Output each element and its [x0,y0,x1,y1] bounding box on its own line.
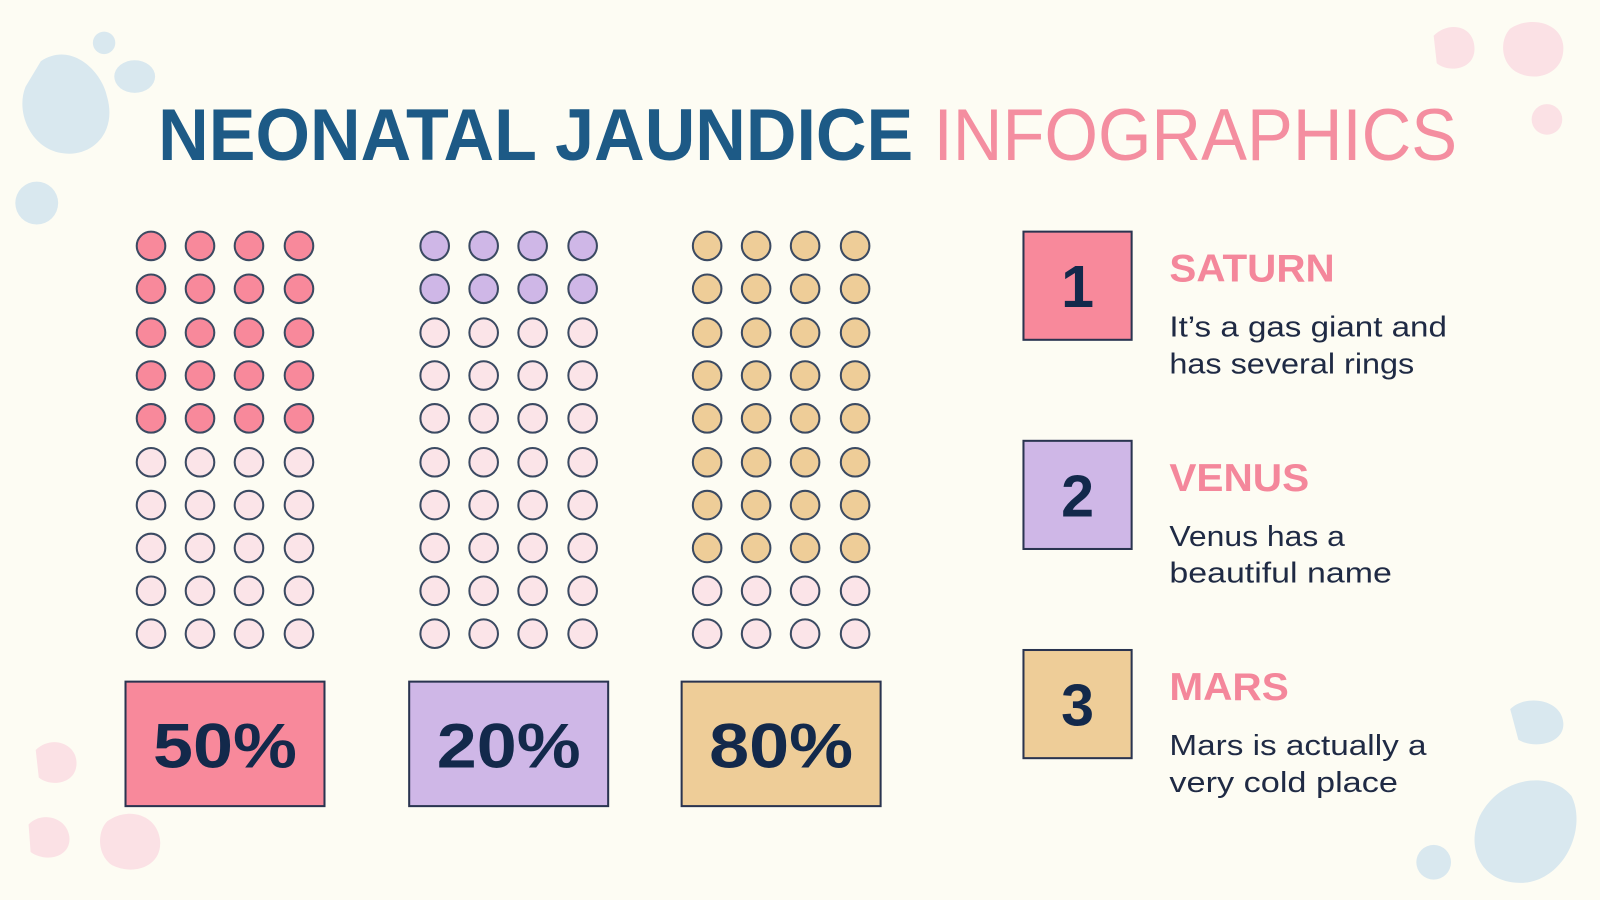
item 1: Saturn: has several rings [1169,348,1414,380]
item 2: Venus: 2 [1061,462,1094,529]
item 2: Venus: Venus has a [1169,521,1345,553]
item 3: Mars: Mars is actually a [1169,730,1427,762]
item 1: Saturn: SATURN [1169,248,1335,291]
percentage label: 20% [409,682,608,806]
item 2: Venus [1023,441,1392,590]
item 1: Saturn: 1 [1061,253,1094,320]
percentage label: 80% [682,682,881,806]
item 3: Mars: 3 [1061,672,1094,739]
percentage label: 50% [126,682,324,806]
item 2: Venus: VENUS [1169,457,1309,500]
item 3: Mars: very cold place [1169,767,1398,799]
percentage label: 50%: 50% [153,711,297,781]
item 3: Mars [1023,650,1427,799]
title: INFOGRAPHICS [934,93,1457,176]
dot chart: 80% [693,232,869,648]
percentage label: 80%: 80% [709,711,853,781]
percentage label: 20%: 20% [437,711,581,781]
dot chart: 20% [420,232,597,648]
title: NEONATAL JAUNDICE [158,93,913,176]
item 1: Saturn [1023,232,1447,380]
item 3: Mars: MARS [1169,666,1289,709]
item 1: Saturn: It’s a gas giant and [1169,312,1447,344]
title [158,93,1457,176]
item 2: Venus: beautiful name [1169,558,1392,590]
dot chart: 50% [137,232,313,648]
